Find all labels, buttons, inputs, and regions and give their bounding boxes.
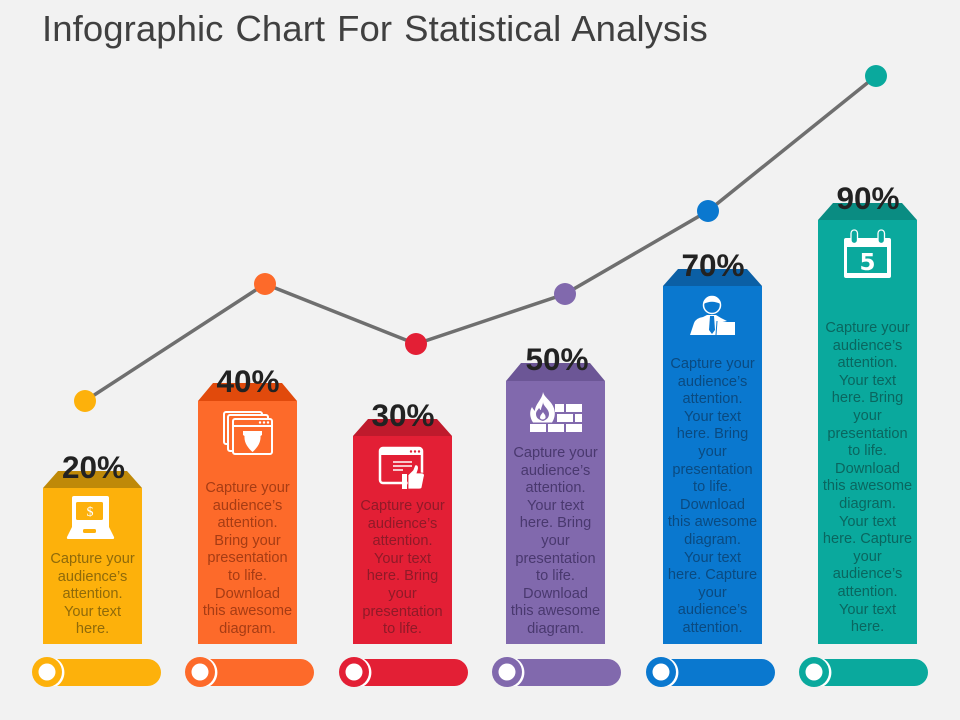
icon: laptop with dollar — [67, 496, 114, 539]
text: teal bar: your — [853, 408, 882, 424]
bar: 70% blue — [663, 247, 762, 644]
text: blue bar: audience’s — [678, 602, 747, 618]
text: red bar: your — [388, 586, 417, 602]
text: teal bar: audience’s — [833, 566, 902, 582]
bar: 50% purple — [506, 341, 605, 644]
text: blue bar: Your text — [684, 550, 741, 566]
text: purple bar: Download — [523, 586, 588, 602]
text: blue bar — [668, 356, 757, 636]
pill: orange — [185, 657, 314, 687]
text: orange bar: presentation — [207, 550, 288, 566]
pill: red — [339, 657, 468, 687]
bar: 20% yellow — [43, 449, 142, 644]
text: teal bar: Capture your — [825, 320, 910, 336]
value: 50%: 50% — [525, 341, 589, 377]
text: blue bar: Download — [680, 497, 745, 513]
text: purple bar — [511, 445, 600, 637]
text: blue bar: this awesome — [668, 514, 757, 530]
bar: 90% teal — [818, 180, 917, 644]
text: red bar: audience’s — [368, 516, 437, 532]
icon: firewall — [530, 392, 582, 432]
text: teal bar: your — [853, 549, 882, 565]
text: teal bar: Your text — [839, 514, 896, 530]
value: 20%: 20% — [62, 449, 125, 485]
value: 40%: 40% — [216, 363, 280, 399]
text: teal bar: diagram. — [839, 496, 896, 512]
text: orange bar: Capture your — [205, 480, 290, 496]
pill: blue — [646, 657, 775, 687]
text: purple bar: audience’s — [521, 463, 590, 479]
text: blue bar: diagram. — [684, 532, 741, 548]
text: teal bar: here. Capture — [823, 531, 912, 547]
bar: 30% red — [353, 397, 452, 644]
text: yellow bar: Capture your — [50, 551, 135, 567]
text: purple bar: attention. — [525, 480, 586, 496]
text: teal bar: attention. — [837, 584, 898, 600]
text: blue bar: audience’s — [678, 374, 747, 390]
text: yellow bar — [50, 551, 135, 637]
text: blue bar: attention. — [682, 620, 743, 636]
text: purple bar: here. Bring — [520, 515, 591, 531]
text: yellow bar: Your text — [64, 604, 121, 620]
text: blue bar: here. Bring — [677, 426, 748, 442]
text: yellow bar: here. — [76, 621, 109, 637]
text: teal bar: here. Bring — [832, 390, 903, 406]
pill: purple — [492, 657, 621, 687]
text: purple bar: to life. — [536, 568, 575, 584]
pill: yellow — [32, 657, 161, 687]
text: red bar: Your text — [374, 551, 431, 567]
text: teal bar: here. — [851, 619, 884, 635]
text: purple bar: presentation — [515, 551, 596, 567]
text: purple bar: your — [541, 533, 570, 549]
icon: stacked windows with shield — [224, 412, 272, 454]
icon: calendar: 5 — [859, 250, 876, 276]
text: blue bar: here. Capture — [668, 567, 757, 583]
text: orange bar — [203, 480, 292, 637]
pill: teal — [799, 657, 928, 687]
text: orange bar: Download — [215, 586, 280, 602]
text: purple bar: Your text — [527, 498, 584, 514]
text: blue bar: presentation — [672, 462, 753, 478]
text: orange bar: to life. — [228, 568, 267, 584]
text: teal bar: this awesome — [823, 478, 912, 494]
text: orange bar: attention. — [217, 515, 278, 531]
text: teal bar: to life. — [848, 443, 887, 459]
icon: businessman with laptop — [690, 296, 735, 335]
text: red bar: Capture your — [360, 498, 445, 514]
text: blue bar: to life. — [693, 479, 732, 495]
text: purple bar: Capture your — [513, 445, 598, 461]
text: red bar: to life. — [383, 621, 422, 637]
text: teal bar: presentation — [827, 426, 908, 442]
text: yellow bar: audience’s — [58, 569, 127, 585]
text: teal bar: Your text — [839, 373, 896, 389]
text: teal bar: attention. — [837, 355, 898, 371]
text: orange bar: diagram. — [219, 621, 276, 637]
text: yellow bar: attention. — [62, 586, 123, 602]
text: teal bar: Your text — [839, 602, 896, 618]
text: blue bar: your — [698, 585, 727, 601]
text: blue bar: your — [698, 444, 727, 460]
text: purple bar: diagram. — [527, 621, 584, 637]
icon: laptop with dollar: $ — [86, 505, 94, 520]
text: teal bar: Download — [835, 461, 900, 477]
text: red bar: here. Bring — [367, 568, 438, 584]
text: orange bar: this awesome — [203, 603, 292, 619]
icon: browser window with thumbs up — [380, 448, 424, 489]
text: red bar: presentation — [362, 604, 443, 620]
text: purple bar: this awesome — [511, 603, 600, 619]
value: 70%: 70% — [681, 247, 745, 283]
value: 90%: 90% — [836, 180, 900, 216]
text: red bar: attention. — [372, 533, 433, 549]
text: blue bar: Capture your — [670, 356, 755, 372]
text: orange bar: Bring your — [214, 533, 281, 549]
value: 30%: 30% — [371, 397, 435, 433]
trend line with markers — [74, 65, 887, 412]
bar: 40% orange — [198, 363, 297, 644]
text: blue bar: attention. — [682, 391, 743, 407]
text: blue bar: Your text — [684, 409, 741, 425]
title: Infographic Chart For Statistical Analysis — [42, 8, 708, 49]
text: orange bar: audience’s — [213, 498, 282, 514]
text: teal bar — [823, 320, 912, 635]
icon: calendar — [844, 230, 891, 278]
text: red bar — [360, 498, 445, 637]
text: teal bar: audience’s — [833, 338, 902, 354]
